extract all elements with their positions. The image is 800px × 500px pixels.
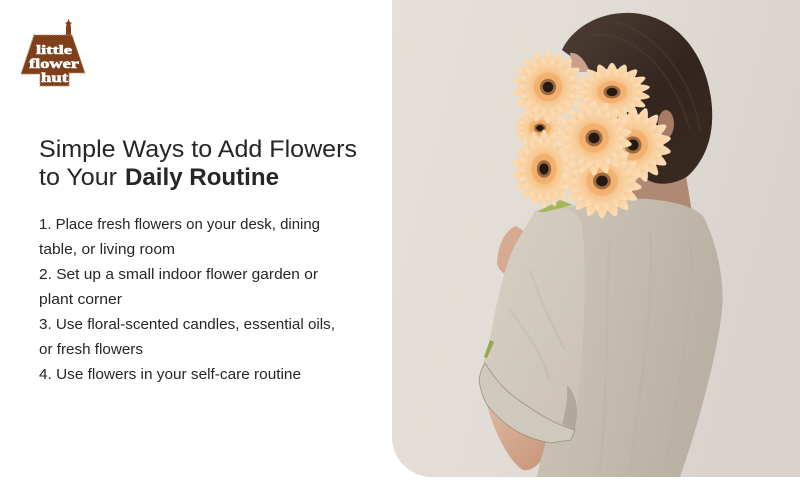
list of tips: 3. Use floral-scented candles, essential oils, (39, 316, 335, 333)
armhole shadow (562, 385, 577, 430)
list of tips: 2. Set up a small indoor flower garden or (39, 266, 318, 283)
neck (620, 170, 692, 212)
dress (515, 199, 723, 477)
list of tips: 1. Place fresh flowers on your desk, dining (39, 216, 320, 233)
hair strands (590, 22, 700, 130)
logo text: flower (29, 57, 79, 72)
house shape (21, 35, 85, 86)
arm (487, 405, 552, 470)
title: Daily Routine (125, 164, 279, 191)
logo text (29, 42, 79, 86)
chimney (65, 19, 72, 37)
face sliver (570, 53, 590, 72)
logo text: little (36, 42, 72, 57)
photo: woman holding flowers (392, 0, 800, 477)
list of tips: 4. Use flowers in your self-care routine (39, 366, 301, 383)
title: to Your (39, 164, 117, 191)
flower bouquet (503, 45, 680, 224)
logo text: hut (41, 71, 68, 86)
hand (497, 226, 530, 278)
title (39, 136, 357, 191)
ear (658, 110, 674, 138)
logo: little flower hut (21, 19, 85, 86)
wall background (392, 0, 800, 477)
list of tips: or fresh flowers (39, 341, 143, 358)
hair (562, 13, 712, 184)
list of tips (39, 216, 335, 383)
sleeve (480, 207, 585, 443)
sleeve cuff (479, 363, 575, 443)
green leaves (537, 200, 573, 212)
list of tips: plant corner (39, 291, 122, 308)
dress folds (510, 230, 691, 470)
title: Simple Ways to Add Flowers (39, 136, 357, 163)
list of tips: table, or living room (39, 241, 175, 258)
flower stem (484, 340, 494, 358)
